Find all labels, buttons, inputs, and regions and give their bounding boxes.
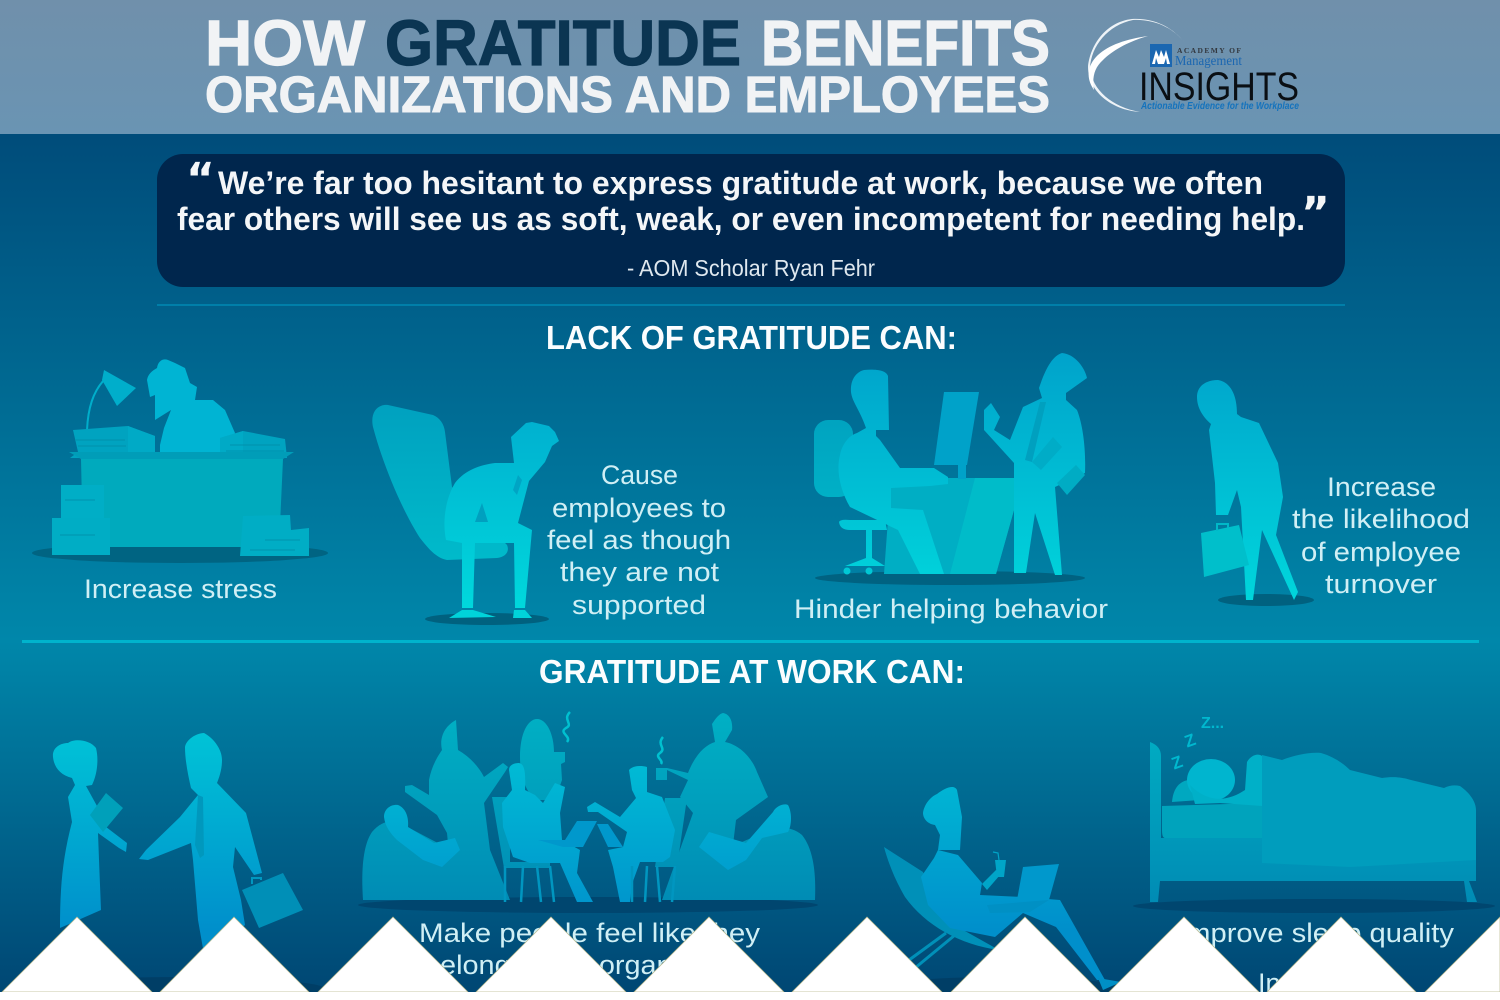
title: BENEFITS — [761, 7, 1050, 79]
title: GRATITUDE — [385, 7, 741, 79]
caption: not supported: they are not — [560, 557, 720, 587]
icon: team relaxing together — [358, 712, 818, 913]
sleep z letters — [1169, 715, 1224, 773]
logo: Academy of Management Insights: INSIGHTS — [1139, 65, 1299, 109]
caption: hinder helping: Hinder helping behavior — [794, 594, 1108, 624]
ground shadows — [35, 977, 1125, 1000]
logo: Academy of Management Insights: Actionable Evidence for the Workplace — [1140, 101, 1299, 112]
title: ORGANIZATIONS AND EMPLOYEES — [205, 66, 1050, 123]
caption: not supported: feel as though — [547, 525, 731, 555]
heading: gratitude at work: GRATITUDE AT WORK CAN: — [539, 653, 965, 690]
title — [205, 7, 1050, 123]
standing and background figures — [405, 713, 768, 900]
caption: increase stress: Increase stress — [84, 574, 277, 604]
heading: lack of gratitude: LACK OF GRATITUDE CAN: — [546, 319, 957, 356]
caption: not supported: employees to — [552, 493, 726, 523]
laptops — [538, 821, 623, 847]
chair legs — [505, 866, 675, 902]
icon: unsupported employee in chair — [372, 405, 559, 625]
caption: employee turnover: the likelihood — [1292, 504, 1470, 534]
quote text: fear others will see us as soft, weak, or even incompetent for needing help. — [177, 201, 1305, 237]
coffee steam — [563, 712, 663, 764]
closing quote mark: ” — [1301, 188, 1330, 239]
sleep z letters: Z — [1169, 752, 1185, 773]
caption: feel like they belong — [419, 918, 761, 980]
icon: person asleep in bed — [1133, 715, 1495, 913]
quote text — [177, 165, 1305, 237]
bean bags — [362, 821, 815, 900]
caption: not supported: Cause — [601, 460, 678, 490]
lounging figures — [384, 804, 791, 870]
caption: employee turnover — [1292, 472, 1470, 599]
sleep z letters: Z — [1182, 730, 1198, 751]
caption: employee turnover: Increase — [1327, 472, 1436, 502]
caption: feel like they belong: Make people feel like they — [419, 918, 761, 948]
sleep z letters: Z... — [1201, 715, 1224, 732]
caption: not supported — [547, 460, 731, 620]
icon: stressed worker at desk — [32, 359, 328, 563]
logo: Academy of Management Insights — [1088, 19, 1299, 112]
caption: feel like they belong: belong to the organization — [424, 950, 756, 980]
seated figures — [502, 763, 675, 902]
caption: not supported: supported — [572, 590, 706, 620]
caption: sleep quality: In — [1258, 968, 1281, 998]
title: HOW — [205, 7, 366, 79]
icon: employee leaving with briefcase — [1197, 380, 1314, 606]
logo: Academy of Management Insights: ACADEMY OF — [1177, 46, 1241, 55]
icon: two coworkers at a desk — [814, 353, 1087, 585]
header band — [0, 0, 1500, 134]
quote panel — [157, 154, 1345, 287]
attribution: - AOM Scholar Ryan Fehr — [627, 255, 875, 281]
quote text: We’re far too hesitant to express gratitude at work, because we often — [218, 165, 1263, 201]
caption: employee turnover: of employee — [1301, 537, 1461, 567]
torn page edge: white zigzag — [0, 917, 1500, 1000]
icon: colleagues shaking hands — [53, 733, 303, 960]
caption: sleep quality — [1178, 918, 1455, 998]
caption: sleep quality: Improve sleep quality — [1178, 918, 1455, 948]
caption: employee turnover: turnover — [1325, 569, 1437, 599]
opening quote mark: “ — [186, 154, 215, 205]
logo: Academy of Management Insights: Management — [1175, 54, 1242, 69]
icon: man relaxing with laptop — [884, 787, 1121, 990]
